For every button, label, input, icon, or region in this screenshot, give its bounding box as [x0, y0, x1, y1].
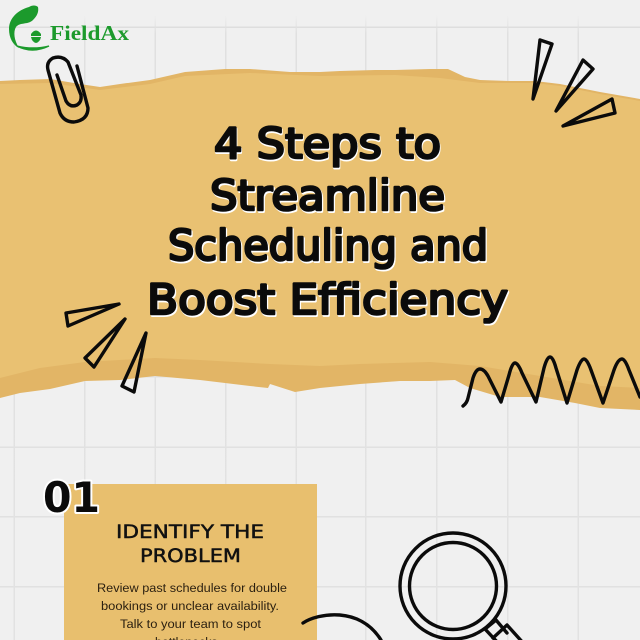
- logo: FieldAx: [9, 6, 130, 50]
- panel: step 01 card: [43, 473, 317, 640]
- step number 01: 01: [43, 473, 100, 522]
- step heading: IDENTIFY THE: [116, 521, 264, 543]
- step body text: Talk to your team to spot: [120, 617, 262, 631]
- icon: spikes lower left: [66, 304, 146, 392]
- title: Streamline: [210, 171, 445, 220]
- title: Boost Efficiency: [147, 275, 508, 324]
- icon: spikes top right: [533, 40, 615, 126]
- title: 4 Steps to: [214, 119, 441, 168]
- step heading: PROBLEM: [140, 545, 241, 567]
- icon: paperclip: [48, 57, 88, 122]
- logo wordmark: FieldAx: [50, 21, 130, 45]
- step body text: bookings or unclear availability.: [101, 599, 279, 613]
- step body text: [97, 581, 287, 640]
- title: Boost Efficiency: [148, 276, 509, 326]
- icon: zigzag scribble: [463, 357, 640, 406]
- title: [147, 119, 509, 326]
- title: 4 Steps to: [214, 120, 442, 170]
- icon: magnifying glass: [400, 533, 525, 640]
- icon: curved line: [303, 615, 381, 640]
- panel: torn paper banner: [0, 69, 640, 410]
- title: Scheduling and: [169, 222, 489, 272]
- title: Scheduling and: [168, 221, 488, 270]
- step body text: Review past schedules for double: [97, 581, 287, 595]
- icon: logo swoosh: [9, 6, 49, 50]
- step heading: [116, 521, 264, 567]
- title: Streamline: [211, 172, 446, 222]
